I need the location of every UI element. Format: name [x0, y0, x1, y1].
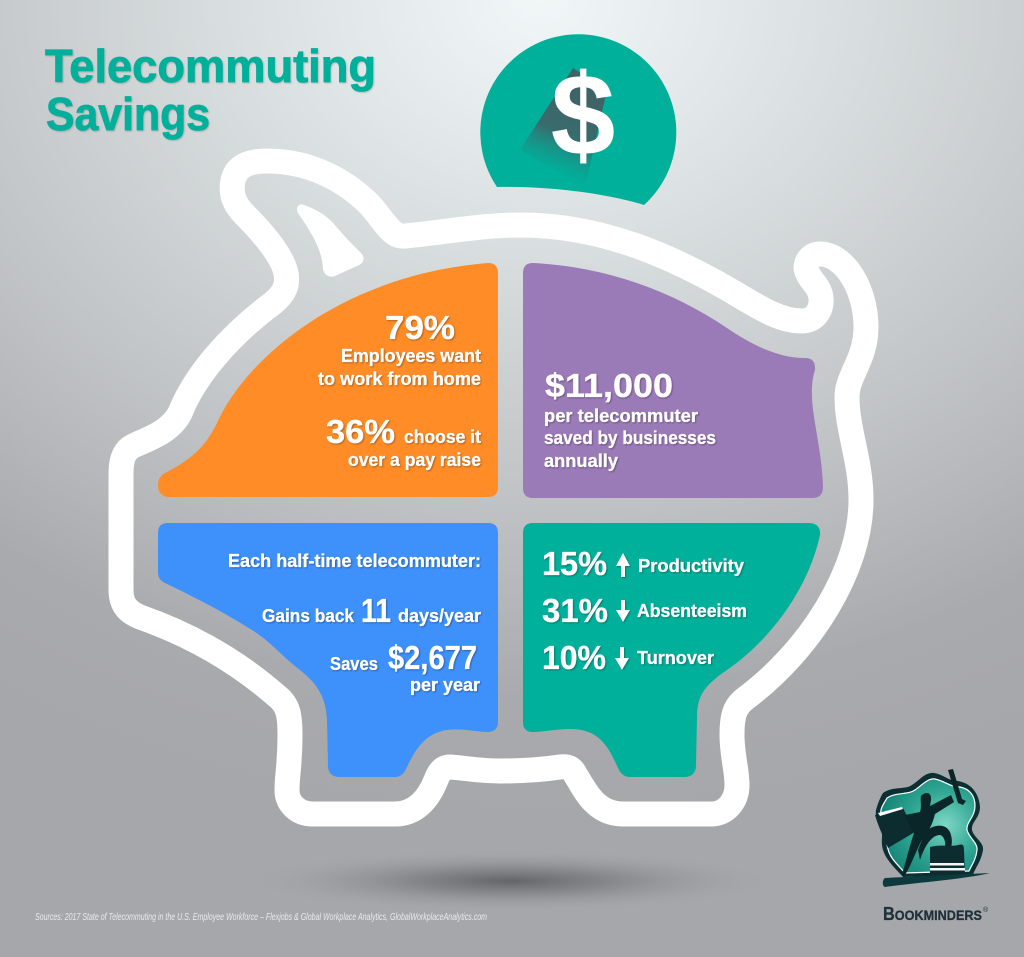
orange panel text: 36%	[326, 413, 395, 450]
blue shape	[158, 523, 498, 777]
metric: turnover: Turnover	[637, 648, 714, 668]
purple panel text: per telecommuter	[544, 405, 698, 426]
panel: purple business savings	[523, 263, 823, 498]
floor shadow	[240, 849, 780, 913]
orange panel text	[318, 309, 481, 470]
purple shape	[523, 263, 823, 498]
logo pen	[948, 769, 966, 805]
blue panel text: per year	[410, 674, 480, 695]
piggy bank outline	[121, 161, 866, 814]
metric: absenteeism: Absenteeism	[637, 601, 747, 621]
teal shape	[523, 523, 820, 777]
title: Telecommuting	[45, 40, 376, 92]
blue panel text: $2,677	[388, 639, 477, 676]
orange panel text: 79%	[385, 309, 455, 346]
purple panel text	[544, 367, 716, 471]
purple panel text: saved by businesses	[544, 427, 716, 448]
title: Savings	[46, 88, 210, 140]
blue panel text: days/year	[398, 605, 481, 626]
metric: productivity: 15%	[542, 545, 607, 582]
title	[45, 40, 376, 140]
logo wordmark: BOOKMINDERS	[883, 904, 982, 924]
metric: turnover: 10%	[542, 639, 606, 676]
logo: Bookminders	[875, 769, 990, 924]
blue panel text: Each half-time telecommuter:	[228, 550, 481, 571]
blue panel text: Gains back	[262, 605, 355, 626]
pig ear inner	[297, 204, 363, 277]
blue panel text: Saves	[330, 653, 378, 674]
purple panel text: annually	[544, 450, 619, 471]
purple panel text: $11,000	[545, 367, 673, 404]
logo figure	[902, 793, 954, 875]
logo blob	[876, 773, 983, 877]
metric: productivity	[542, 545, 744, 582]
logo teal fill	[881, 779, 977, 873]
orange panel text: to work from home	[318, 368, 481, 389]
registered mark: ®	[983, 906, 989, 914]
blue panel text: 11	[361, 592, 391, 629]
metric: absenteeism	[542, 592, 747, 629]
orange panel text: choose it	[404, 426, 481, 447]
orange panel text: Employees want	[341, 345, 481, 366]
metric: productivity: Productivity	[638, 556, 744, 576]
icon: dollar coin: $	[551, 50, 615, 180]
logo book stack	[930, 845, 965, 875]
icon: dollar coin	[480, 34, 676, 205]
panel: blue half-time telecommuter	[158, 523, 498, 777]
sources footnote: Sources: 2017 State of Telecommuting in the U.S. Employee Workforce – Flexjobs & Global Workplace Analytics, GlobalWorkplaceAnalytics.com	[35, 911, 487, 923]
metric: turnover	[542, 639, 714, 676]
panel: orange employees	[158, 263, 498, 497]
orange shape	[158, 263, 498, 497]
metric: absenteeism: 31%	[542, 592, 608, 629]
orange panel text: over a pay raise	[348, 449, 481, 470]
blue panel text	[228, 550, 481, 695]
logo ground	[883, 873, 990, 887]
logo book	[875, 808, 915, 848]
panel: teal business metrics	[523, 523, 820, 777]
